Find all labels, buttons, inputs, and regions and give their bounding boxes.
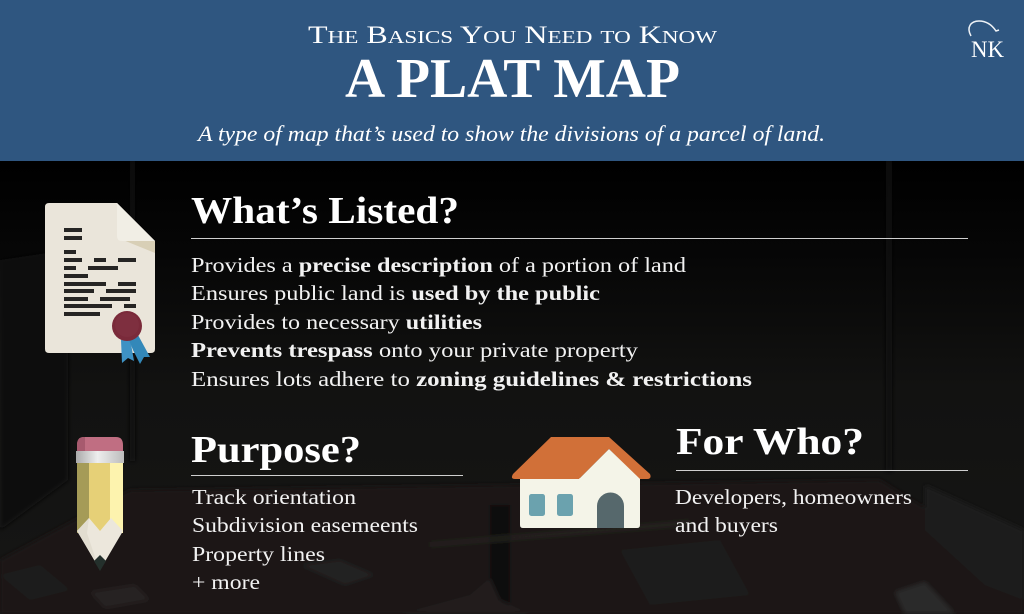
list: what's listed — [191, 253, 752, 391]
icon: pencil — [76, 437, 124, 571]
heading: Purpose: Purpose? — [191, 429, 361, 471]
icon: house — [512, 437, 651, 528]
text: for who — [675, 485, 912, 537]
text: for who: Developers, homeowners — [675, 485, 912, 509]
header band — [0, 0, 1024, 161]
list: purpose: + more — [192, 570, 260, 594]
list: what's listed: Ensures public land is used by the public — [191, 281, 600, 305]
heading: What's Listed: What’s Listed? — [191, 190, 459, 232]
title: A PLAT MAP — [345, 48, 680, 110]
list: what's listed: Provides to necessary utilities — [191, 310, 482, 334]
icon: ribbon and wax seal — [112, 311, 150, 364]
list: purpose: Subdivision easemeents — [192, 513, 418, 537]
background: dark empty room — [0, 161, 1024, 614]
logo: NK — [969, 21, 1004, 62]
subtitle: A type of map that’s used to show the divisions of a parcel of land. — [196, 121, 825, 146]
text: for who: and buyers — [675, 513, 778, 537]
icon: document with seal — [45, 203, 155, 364]
list: what's listed: Prevents trespass onto your private property — [191, 338, 639, 362]
list: what's listed: Provides a precise description of a portion of land — [191, 253, 687, 277]
header eyebrow: The Basics You Need to Know — [308, 22, 717, 49]
list: purpose — [192, 485, 418, 594]
list: what's listed: Ensures lots adhere to zoning guidelines & restrictions — [191, 367, 752, 391]
list: purpose: Track orientation — [192, 485, 357, 509]
logo: NK: NK — [971, 37, 1004, 62]
list: purpose: Property lines — [192, 542, 325, 566]
heading: For Who: For Who? — [676, 421, 864, 463]
